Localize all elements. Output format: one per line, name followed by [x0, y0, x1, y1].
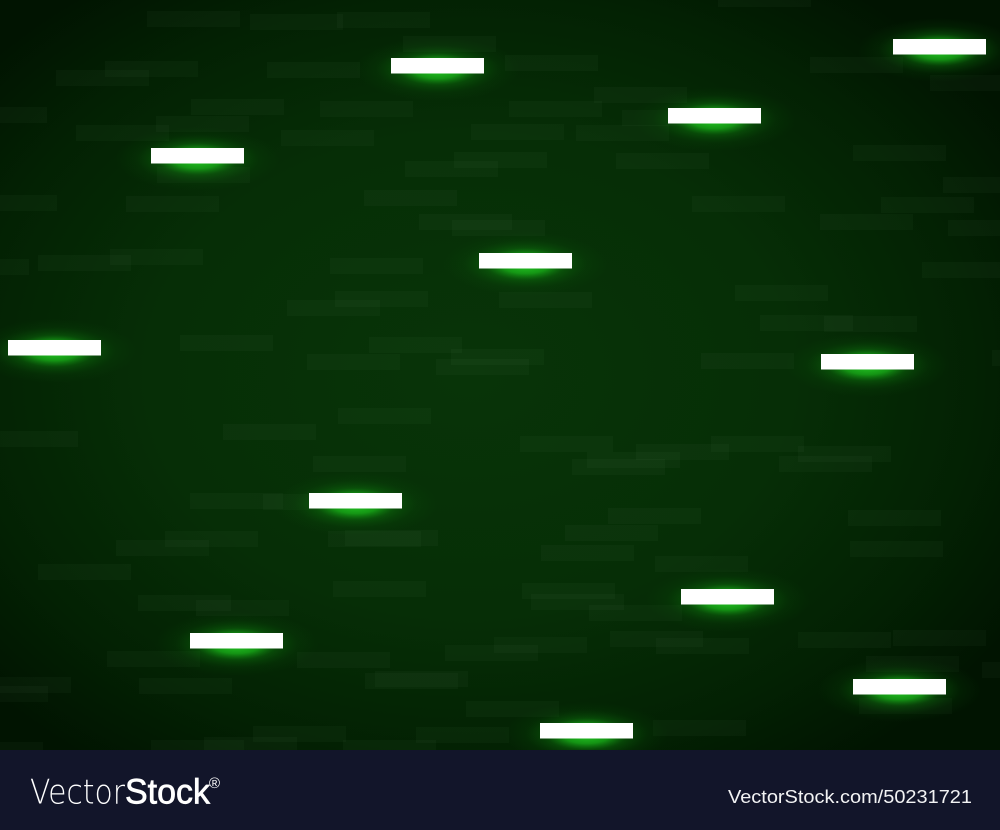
VectorStock logo: Stock	[125, 772, 210, 812]
VectorStock logo: ®	[209, 775, 220, 792]
image URL: VectorStock.com/50231721	[728, 786, 972, 807]
VectorStock logo	[30, 772, 220, 812]
footer bar	[0, 750, 1000, 830]
VectorStock logo: Vector	[30, 772, 125, 812]
